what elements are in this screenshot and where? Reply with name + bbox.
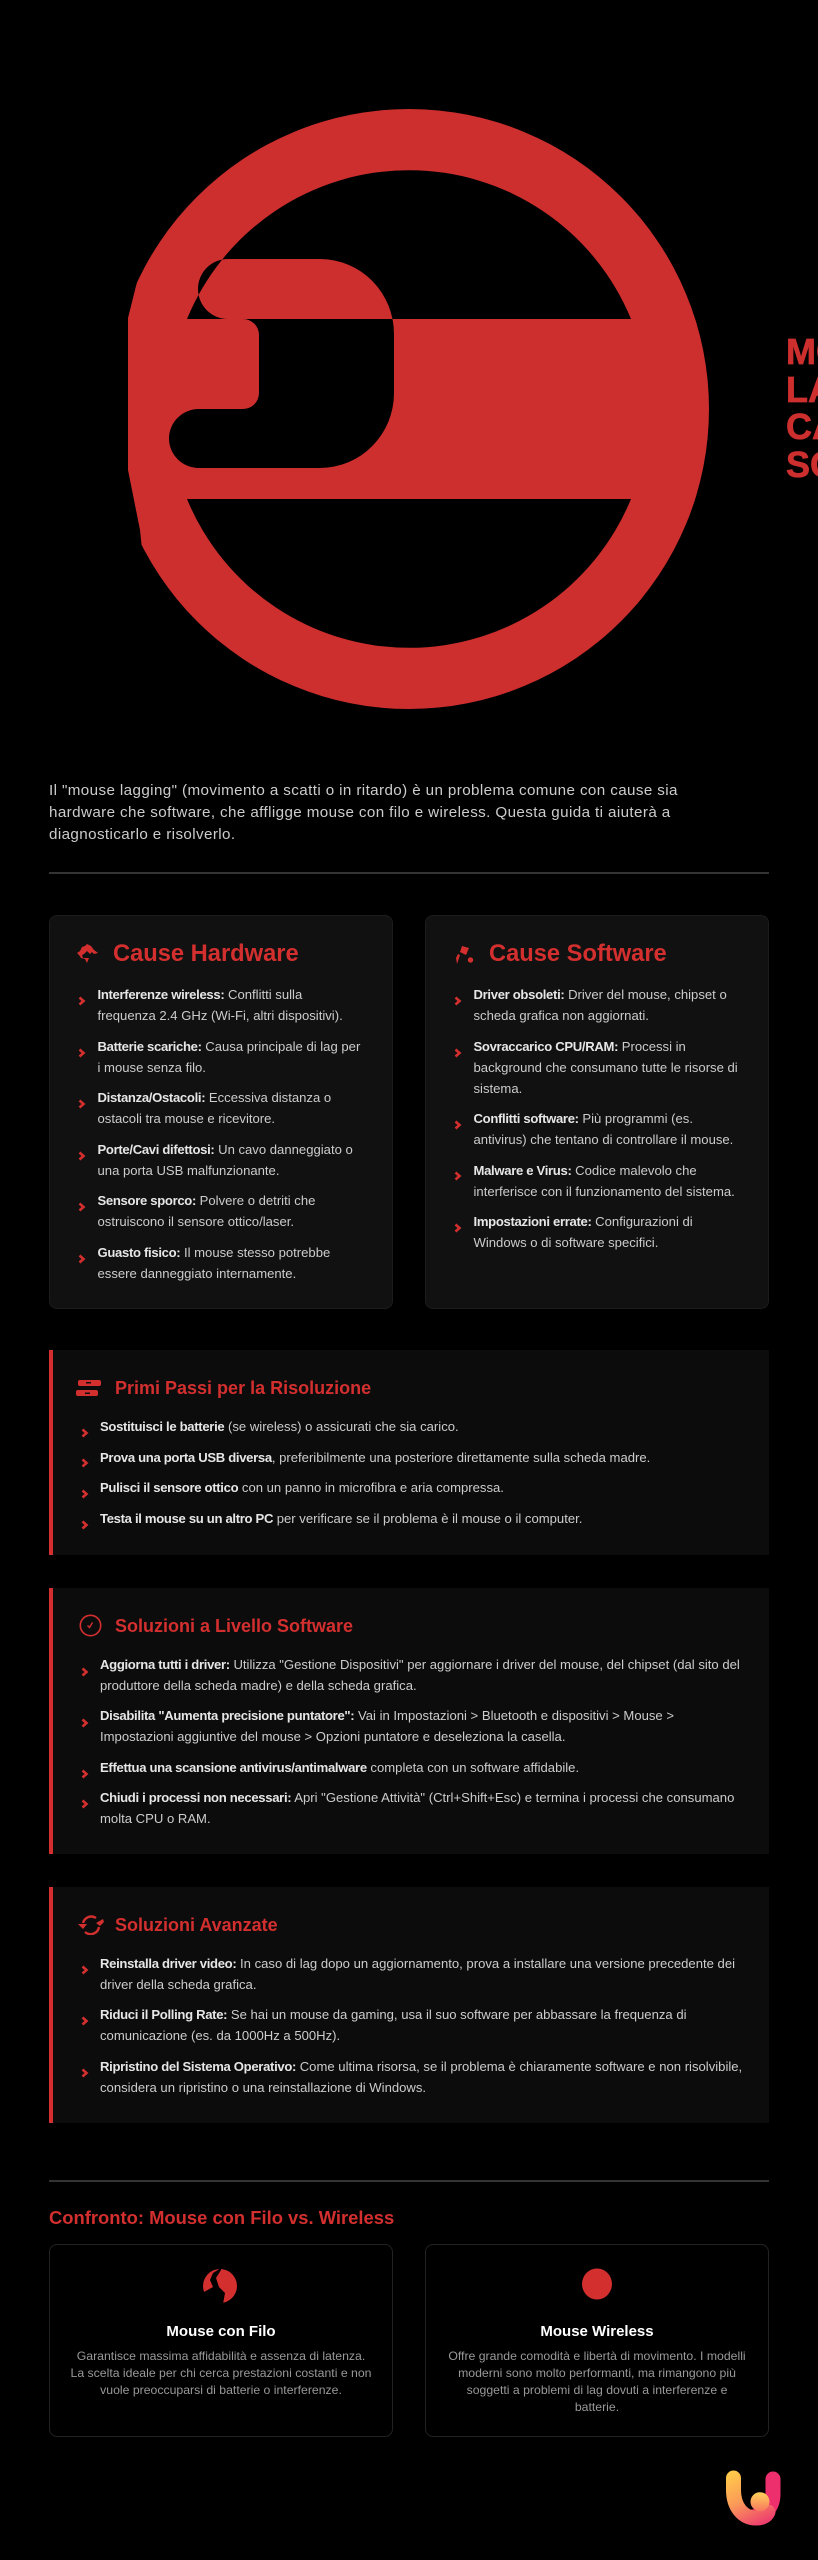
- item: malware: [474, 1163, 735, 1199]
- chevron: [82, 1668, 88, 1676]
- item: interferenze: Interferenze wireless: Conflitti sulla: [98, 987, 302, 1002]
- icon: sync arrows: [78, 1915, 105, 1935]
- heading: Cause Hardware: [113, 941, 299, 967]
- item: malware: interferisce con il funzionamento del sistema.: [474, 1184, 735, 1199]
- chevron: [78, 1152, 86, 1160]
- heading: Cause Software: [489, 941, 667, 967]
- chevron: [81, 1769, 89, 1779]
- panel: primi passi: [49, 1350, 769, 1555]
- item: sovraccarico: sistema.: [474, 1081, 522, 1096]
- item: malware: Malware e Virus: Codice malevolo che: [474, 1163, 697, 1178]
- chevron: [81, 1799, 89, 1809]
- item: polling rate: Riduci il Polling Rate: Se hai un mouse da gaming, usa il suo software per abbassare la frequenza di: [100, 2007, 687, 2022]
- item: altro pc: Testa il mouse su un altro PC per verificare se il problema è il mouse o il computer.: [100, 1511, 582, 1526]
- chevron: [454, 1224, 462, 1232]
- card description: [426, 2348, 768, 2416]
- card description: La scelta ideale per chi cerca prestazioni costanti e non: [70, 2366, 371, 2380]
- chevron: [82, 1428, 88, 1438]
- item: sensore: [98, 1193, 315, 1229]
- item: impostazioni: Impostazioni errate: Configurazioni di: [474, 1214, 693, 1229]
- item: processi: Chiudi i processi non necessari: Apri "Gestione Attività" (Ctrl+Shift+Esc) e termina i processi che consumano: [100, 1790, 734, 1805]
- item: impostazioni: Windows o di software specifici.: [474, 1235, 658, 1250]
- item: driver: scheda grafica non aggiornati.: [474, 1008, 649, 1023]
- item: porte: Porte/Cavi difettosi: Un cavo danneggiato o: [98, 1142, 353, 1157]
- item: ripristino: considera un ripristino o una reinstallazione di Windows.: [100, 2080, 426, 2095]
- item: interferenze: frequenza 2.4 GHz (Wi-Fi, altri dispositivi).: [98, 1008, 343, 1023]
- item: ripristino: Ripristino del Sistema Operativo: Come ultima risorsa, se il problema è chiaramente software e non risolvibile,: [100, 2059, 742, 2074]
- card title: Mouse con Filo: [166, 2323, 276, 2340]
- item: sensore: Pulisci il sensore ottico con un panno in microfibra e aria compressa.: [100, 1480, 504, 1495]
- item: distanza: Distanza/Ostacoli: Eccessiva distanza o: [98, 1090, 331, 1105]
- item: precisione: Disabilita "Aumenta precisione puntatore": Vai in Impostazioni > Bluetooth e dispositivi > Mouse >: [100, 1708, 674, 1723]
- chevron: [81, 1965, 89, 1975]
- card description: [50, 2348, 392, 2399]
- logo: [720, 2465, 788, 2531]
- item: interferenze: [98, 987, 343, 1023]
- item: precisione: [100, 1708, 674, 1744]
- item: batterie: i mouse senza filo.: [98, 1060, 206, 1075]
- chevron: [78, 1202, 86, 1212]
- intro text: Il "mouse lagging" (movimento a scatti o in ritardo) è un problema comune con cause sia: [49, 782, 678, 799]
- panel: cause software: [425, 915, 769, 1309]
- heading: Soluzioni a Livello Software: [115, 1616, 353, 1636]
- chevron: [454, 1172, 462, 1180]
- item: distanza: [98, 1090, 331, 1126]
- item: batterie: [98, 1039, 360, 1075]
- item: driver: Driver obsoleti: Driver del mouse, chipset o: [474, 987, 727, 1002]
- card description: batterie.: [575, 2400, 619, 2414]
- chevron: [82, 1718, 88, 1728]
- item: impostazioni: [474, 1214, 693, 1250]
- panel: mouse con filo: [49, 2244, 393, 2437]
- chevron: [82, 1490, 88, 1498]
- card description: vuole preoccuparsi di batterie o interferenze.: [100, 2383, 342, 2397]
- item: porta usb: Prova una porta USB diversa, preferibilmente una posteriore direttamente sulla scheda madre.: [100, 1450, 650, 1465]
- item: antivirus: Effettua una scansione antivirus/antimalware completa con un software affidabile.: [100, 1760, 579, 1775]
- chevron: [78, 996, 86, 1006]
- item: conflitti: Conflitti software: Più programmi (es.: [474, 1111, 693, 1126]
- chevron: [78, 1048, 86, 1058]
- panel: soluzioni software: [49, 1588, 769, 1854]
- item: sensore: ostruiscono il sensore ottico/laser.: [98, 1214, 294, 1229]
- card description: moderni sono molto performanti, ma rimangono più: [458, 2366, 736, 2380]
- heading: Soluzioni Avanzate: [115, 1915, 278, 1935]
- chevron: [81, 2016, 89, 2026]
- item: sensore: Sensore sporco: Polvere o detriti che: [98, 1193, 315, 1208]
- intro text: diagnosticarlo e risolverlo.: [49, 826, 236, 843]
- item: driver video: driver della scheda grafica.: [100, 1977, 256, 1992]
- icon: software: [456, 946, 474, 964]
- icon: hardware: [77, 944, 98, 963]
- chevron: [78, 1254, 86, 1264]
- item: guasto: essere danneggiato internamente.: [98, 1266, 296, 1281]
- hero icon: mouse with slashed circle: [128, 109, 709, 709]
- chevron: [78, 1100, 86, 1108]
- item: sovraccarico: [474, 1039, 738, 1096]
- panel: mouse wireless: [425, 2244, 769, 2437]
- comparison heading: Confronto: Mouse con Filo vs. Wireless: [49, 2207, 394, 2228]
- item: batterie: Sostituisci le batterie (se wireless) o assicurati che sia carico.: [100, 1419, 459, 1434]
- icon: clock check: [80, 1614, 102, 1636]
- item: guasto: [98, 1245, 330, 1281]
- item: processi: molta CPU o RAM.: [100, 1811, 211, 1826]
- item: driver: produttore della scheda madre) e della scheda grafica.: [100, 1678, 417, 1693]
- title: [786, 333, 818, 483]
- item: driver: [100, 1657, 740, 1693]
- chevron: [81, 2068, 89, 2078]
- card description: soggetti a problemi di lag dovuti a interferenze e: [467, 2383, 727, 2397]
- intro text: [49, 782, 678, 843]
- item: precisione: Impostazioni aggiuntive del mouse > Opzioni puntatore e deseleziona la casella.: [100, 1729, 565, 1744]
- item: conflitti: antivirus) che tentano di controllare il mouse.: [474, 1132, 733, 1147]
- item: conflitti: [474, 1111, 733, 1147]
- card title: Mouse Wireless: [540, 2323, 654, 2340]
- item: porte: [98, 1142, 353, 1178]
- item: driver video: [100, 1954, 735, 1996]
- item: sovraccarico: background che consumano tutte le risorse di: [474, 1060, 738, 1075]
- chevron: [454, 1048, 462, 1058]
- item: sovraccarico: Sovraccarico CPU/RAM: Processi in: [474, 1039, 686, 1054]
- item: distanza: ostacoli tra mouse e ricevitore.: [98, 1111, 275, 1126]
- item: driver video: Reinstalla driver video: In caso di lag dopo un aggiornamento, prova a installare una versione precedente dei: [100, 1956, 735, 1971]
- item: batterie: Batterie scariche: Causa principale di lag per: [98, 1039, 360, 1054]
- icon: tools: [76, 1380, 101, 1396]
- icon: wireless dot: [581, 2268, 613, 2300]
- item: guasto: Guasto fisico: Il mouse stesso potrebbe: [98, 1245, 330, 1260]
- item: processi: [100, 1788, 734, 1830]
- chevron: [454, 1120, 462, 1130]
- panel: cause hardware: [49, 915, 393, 1309]
- chevron: [82, 1458, 88, 1468]
- icon: wired mouse: [203, 2269, 239, 2305]
- item: driver: Aggiorna tutti i driver: Utilizza "Gestione Dispositivi" per aggiornare i driver del mouse, del chipset (dal sito del: [100, 1657, 740, 1672]
- card description: Garantisce massima affidabilità e assenza di latenza.: [77, 2349, 365, 2363]
- item: ripristino: [100, 2057, 742, 2099]
- card description: Offre grande comodità e libertà di movimento. I modelli: [448, 2349, 746, 2363]
- chevron: [454, 996, 462, 1006]
- item: porte: una porta USB malfunzionante.: [98, 1163, 279, 1178]
- panel: soluzioni avanzate: [49, 1887, 769, 2123]
- chevron: [82, 1520, 88, 1530]
- heading: Primi Passi per la Risoluzione: [115, 1378, 371, 1398]
- intro text: hardware che software, che affligge mouse con filo e wireless. Questa guida ti aiuterà a: [49, 804, 671, 821]
- item: driver: [474, 987, 727, 1023]
- item: polling rate: comunicazione (es. da 1000Hz a 500Hz).: [100, 2028, 340, 2043]
- item: polling rate: [100, 2005, 687, 2047]
